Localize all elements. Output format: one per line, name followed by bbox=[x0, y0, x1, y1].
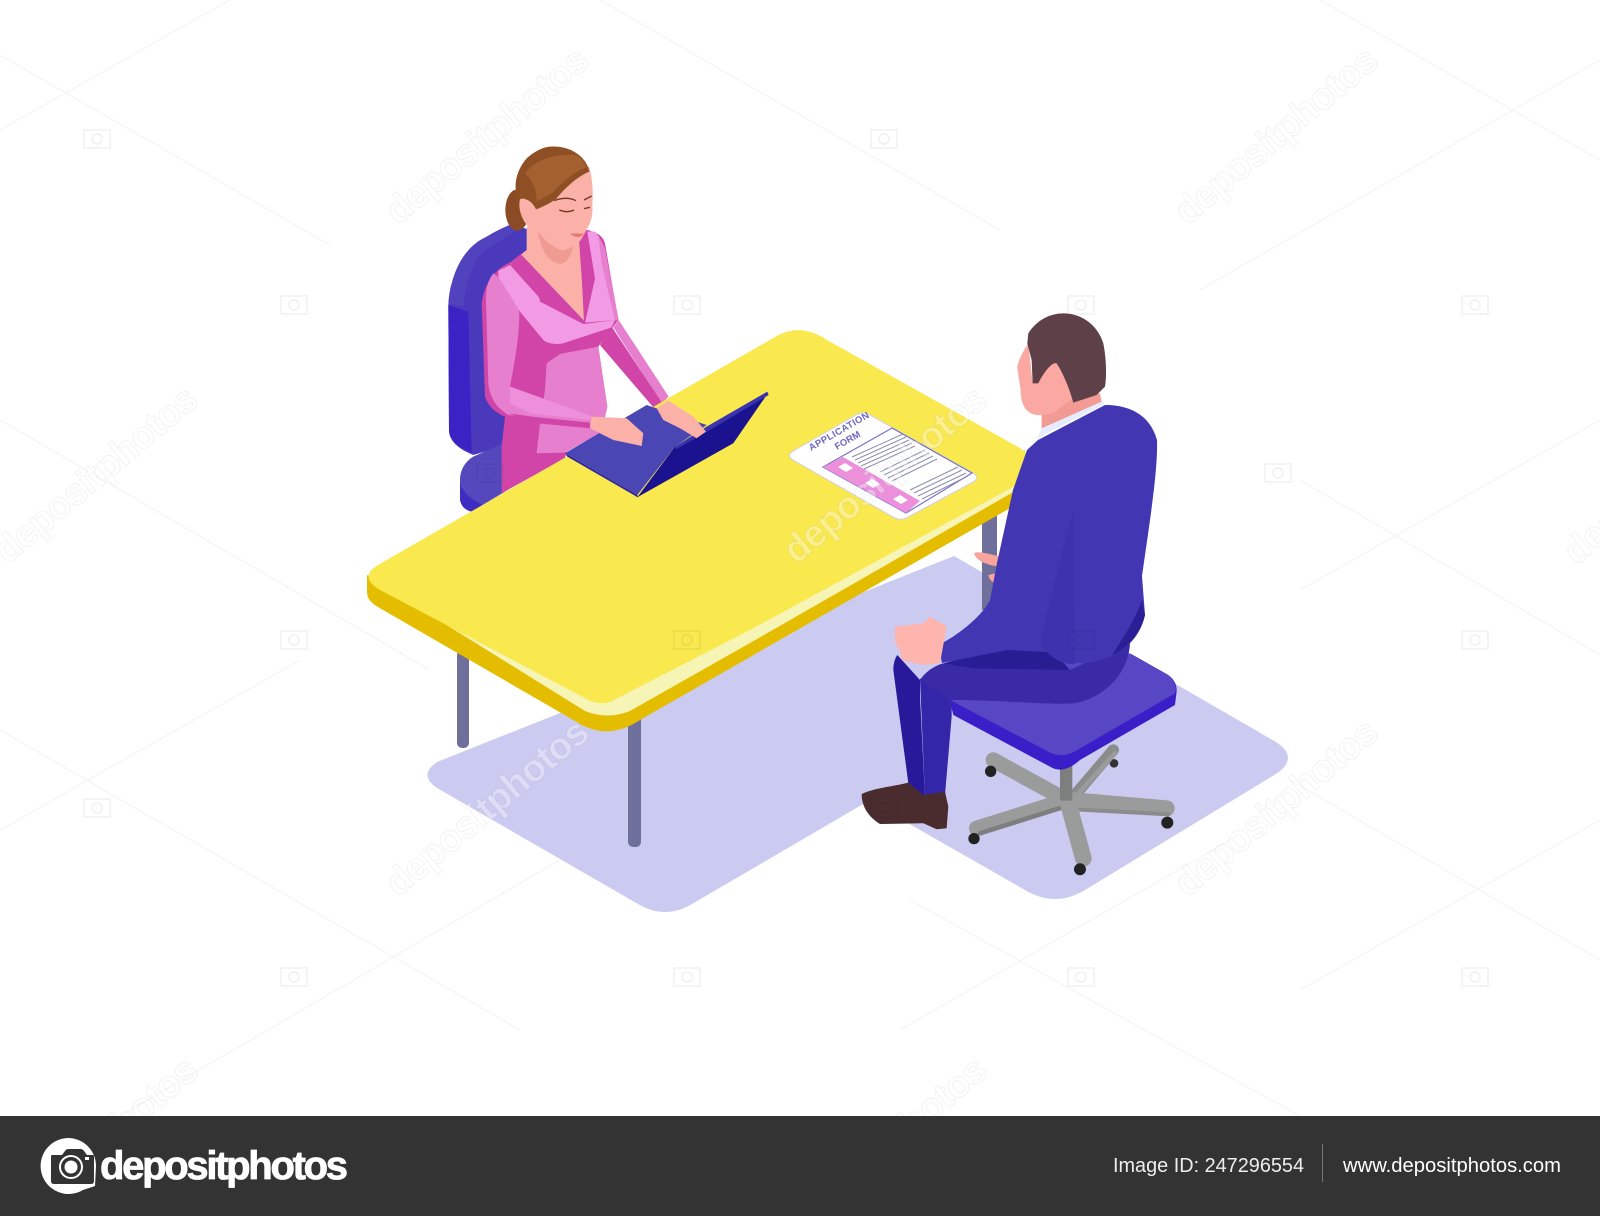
woman bbox=[482, 147, 669, 493]
watermarks: depositphotos bbox=[775, 378, 995, 572]
shoe bbox=[862, 783, 948, 829]
man bbox=[862, 313, 1157, 829]
floor shadow bbox=[428, 556, 1288, 912]
table legs bbox=[457, 505, 997, 847]
watermarks: depositphotos bbox=[1166, 711, 1386, 905]
man's far hand bbox=[974, 552, 1000, 583]
collar bbox=[1037, 402, 1105, 440]
trousers bbox=[502, 445, 567, 493]
face bbox=[1017, 343, 1075, 415]
watermarks: depositphotos bbox=[377, 39, 597, 233]
laptop bbox=[565, 392, 769, 498]
form lines bbox=[852, 434, 966, 499]
icon: camera logo bbox=[41, 1138, 96, 1194]
bun bbox=[505, 189, 529, 231]
woman's chair bbox=[448, 224, 530, 512]
jacket bbox=[938, 405, 1157, 663]
image id: Image ID: 247296554 bbox=[1113, 1155, 1304, 1177]
watermarks: depositphotos bbox=[377, 711, 597, 905]
woman's hands bbox=[590, 401, 706, 446]
jacket left sleeve bbox=[486, 273, 592, 423]
neck bbox=[1042, 393, 1102, 428]
jacket chest panel bbox=[498, 265, 615, 344]
hair bbox=[516, 147, 589, 209]
logo wordmark: depositphotos bbox=[100, 1144, 348, 1188]
watermark camera icons bbox=[84, 130, 1488, 986]
left forearm highlight bbox=[510, 387, 592, 420]
table bbox=[367, 330, 1028, 731]
lower leg bbox=[862, 637, 1130, 829]
pink checkbox strip bbox=[823, 457, 920, 513]
face bbox=[519, 167, 593, 251]
application form bbox=[789, 410, 976, 519]
jacket lapels bbox=[510, 254, 585, 324]
stool base bbox=[968, 750, 1173, 875]
neck shadow bbox=[538, 232, 573, 264]
form title: APPLICATION bbox=[807, 410, 871, 454]
hair bbox=[1027, 313, 1106, 403]
right sleeve bbox=[613, 320, 669, 403]
near hand bbox=[895, 617, 947, 665]
application form: FORM bbox=[833, 429, 863, 453]
stool bbox=[950, 653, 1177, 875]
thigh bbox=[920, 642, 1130, 704]
eyes, brows, lips bbox=[554, 196, 592, 212]
watermarks: depositphotos bbox=[1166, 39, 1386, 233]
jacket waist panel bbox=[537, 347, 607, 453]
neck and chest bbox=[510, 227, 590, 325]
footer bar bbox=[0, 1116, 1600, 1216]
stool seat bbox=[950, 653, 1177, 770]
website url: www.depositphotos.com bbox=[1342, 1155, 1561, 1177]
jacket base bbox=[482, 230, 618, 453]
